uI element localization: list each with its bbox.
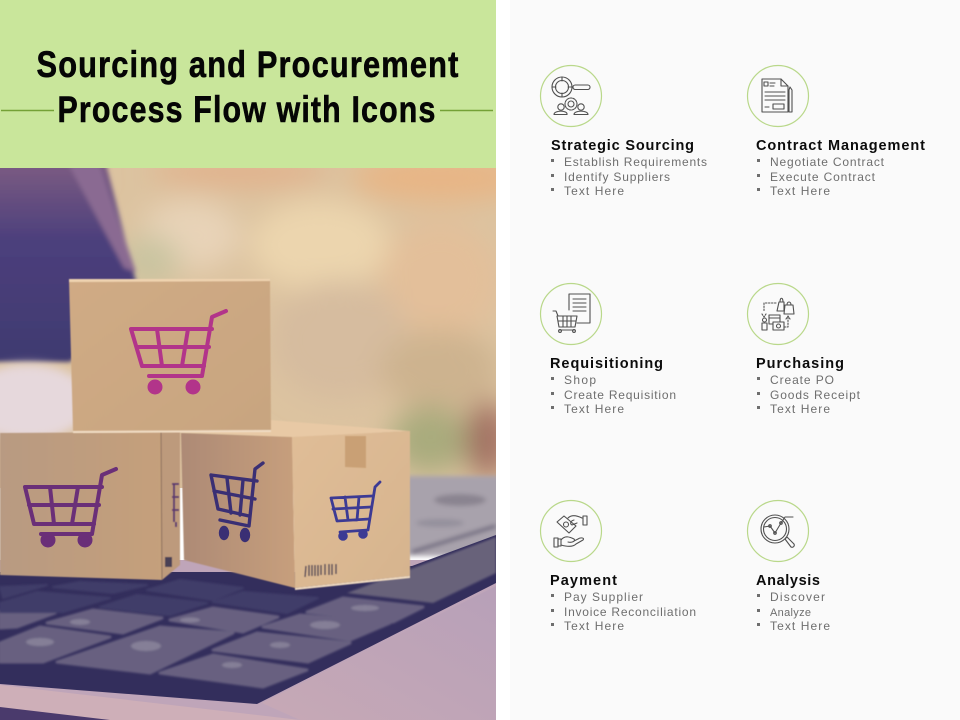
text: Analysis: Discover bbox=[770, 590, 825, 604]
text: Strategic Sourcing bbox=[551, 138, 707, 198]
item: Contract Management bbox=[748, 66, 925, 198]
text: Strategic Sourcing: Establish Requirements bbox=[564, 155, 707, 169]
text: Contract Management bbox=[756, 138, 925, 198]
title side rules bbox=[1, 110, 493, 112]
icon: purchasing cycle bbox=[748, 284, 808, 344]
text: Payment: Text Here bbox=[564, 619, 624, 633]
title: Sourcing and Procurement bbox=[36, 44, 460, 85]
title: Process Flow with Icons bbox=[58, 89, 436, 130]
box: right bbox=[181, 420, 410, 590]
photo: cardboard boxes with shopping carts on a laptop keyboard bbox=[0, 168, 496, 720]
title bbox=[36, 44, 460, 130]
text: Requisitioning: Text Here bbox=[564, 402, 624, 416]
title banner bbox=[0, 0, 496, 168]
box: left bbox=[0, 432, 180, 580]
text: Payment: Pay Supplier bbox=[564, 590, 643, 604]
text: Analysis: Analyze bbox=[770, 607, 811, 619]
blurred background foliage bbox=[0, 168, 496, 488]
dark purple shape on left bbox=[0, 140, 136, 362]
text: Strategic Sourcing: Identify Suppliers bbox=[564, 170, 670, 184]
text: Purchasing bbox=[756, 356, 861, 416]
side cart fragment bbox=[172, 484, 179, 527]
text: Contract Management: Text Here bbox=[770, 184, 830, 198]
icon: magnifier with people and gear bbox=[540, 66, 602, 126]
text: Requisitioning: Requisitioning bbox=[550, 356, 663, 372]
text: Requisitioning: Shop bbox=[564, 373, 596, 387]
text: Contract Management: Contract Management bbox=[756, 138, 925, 154]
text: Purchasing: Goods Receipt bbox=[770, 388, 861, 402]
icon: contract with pen bbox=[748, 66, 808, 126]
text: Analysis: Analysis bbox=[756, 573, 820, 589]
item: Purchasing bbox=[748, 284, 861, 416]
text: Payment bbox=[550, 573, 696, 633]
text: Payment: Invoice Reconciliation bbox=[564, 605, 696, 619]
cart: purple bbox=[25, 469, 116, 546]
item: Payment bbox=[540, 500, 696, 633]
icon: magnifier with line chart bbox=[748, 500, 808, 562]
text: Purchasing: Purchasing bbox=[756, 356, 844, 372]
text: Purchasing: Create PO bbox=[770, 373, 834, 387]
icon: cart and document bbox=[540, 284, 602, 344]
text: Strategic Sourcing: Strategic Sourcing bbox=[551, 138, 694, 154]
text: Requisitioning bbox=[550, 356, 676, 416]
cart: blue on right face bbox=[331, 482, 380, 539]
item: Requisitioning bbox=[540, 284, 676, 416]
item: Analysis bbox=[748, 500, 830, 633]
text: Purchasing: Text Here bbox=[770, 402, 830, 416]
packing tape bbox=[345, 436, 366, 468]
cart: magenta bbox=[131, 311, 226, 392]
text: Contract Management: Execute Contract bbox=[770, 170, 876, 184]
text: Strategic Sourcing: Text Here bbox=[564, 184, 624, 198]
icon: hands exchanging money bbox=[540, 500, 602, 562]
laptop keyboard bbox=[0, 476, 505, 720]
cart: navy on left face bbox=[211, 463, 263, 540]
box: top bbox=[69, 279, 271, 433]
text: Analysis bbox=[756, 573, 830, 633]
text: Requisitioning: Create Requisition bbox=[564, 388, 676, 402]
item: Strategic Sourcing bbox=[540, 66, 707, 198]
text: Analysis: Text Here bbox=[770, 619, 830, 633]
barcode bbox=[305, 564, 336, 577]
text: Payment: Payment bbox=[550, 573, 617, 589]
far keyboard, blurred bbox=[405, 476, 505, 556]
key legends bbox=[26, 605, 379, 668]
pale blurred area behind boxes bbox=[0, 356, 74, 437]
text: Contract Management: Negotiate Contract bbox=[770, 155, 885, 169]
right background panel bbox=[510, 0, 960, 720]
